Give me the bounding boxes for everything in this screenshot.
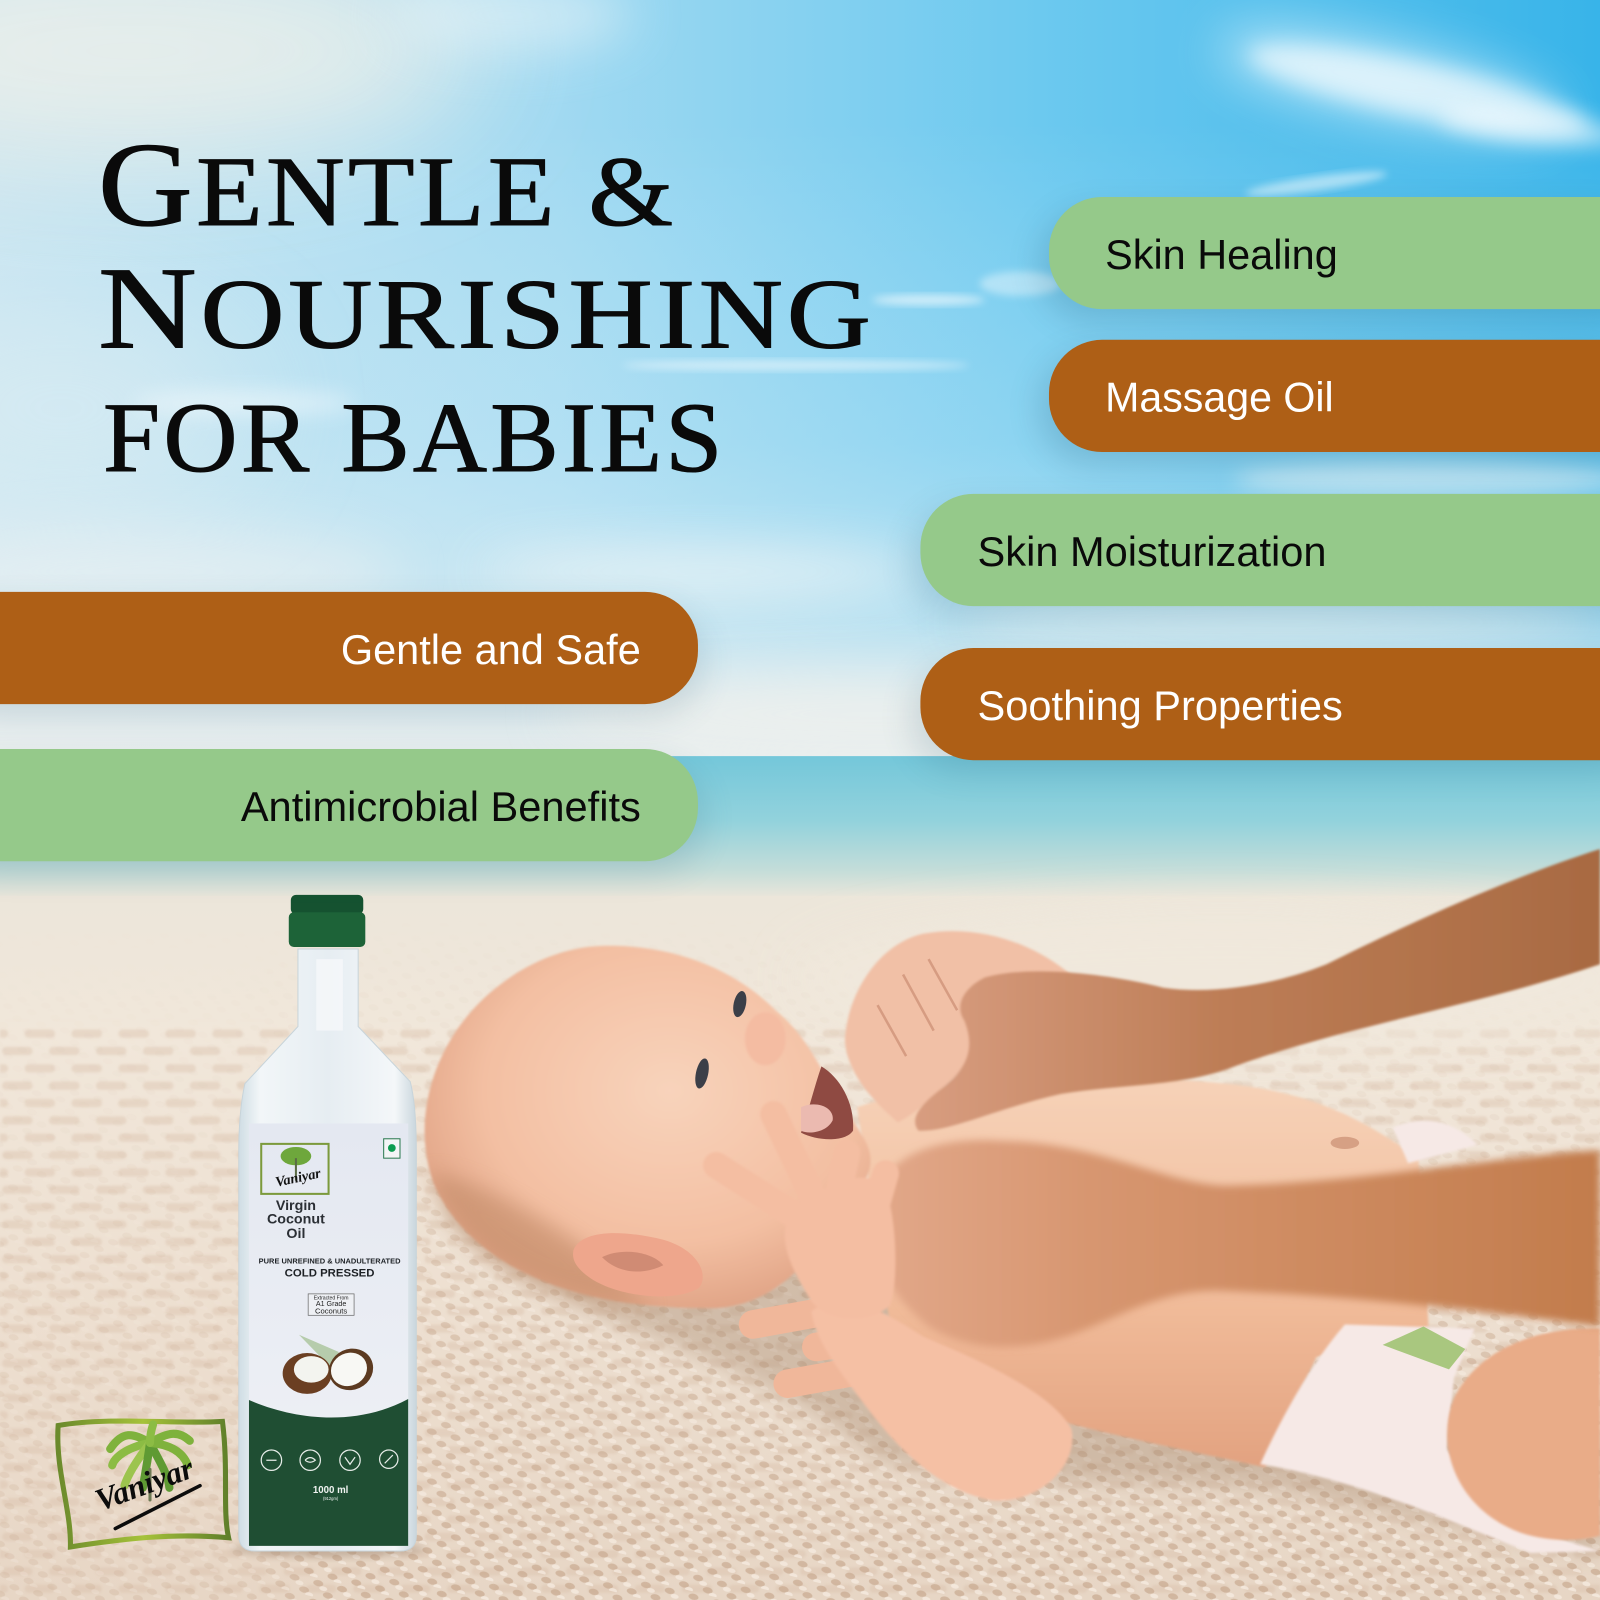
label product name: Oil <box>286 1226 305 1242</box>
logo wordmark: Vaniyar <box>90 1450 199 1518</box>
pill: Massage Oil <box>1039 340 1600 464</box>
diaper <box>1260 1121 1600 1553</box>
ear <box>573 1233 703 1296</box>
title line 1: GENTLE & <box>98 119 677 252</box>
baby upper arm and fist <box>845 931 1082 1122</box>
logo underline <box>115 1486 200 1529</box>
logo palm <box>110 1424 190 1500</box>
background: sand and knit blanket <box>0 896 1600 1600</box>
label volume: (912gm) <box>323 1496 339 1501</box>
brand logo <box>58 1421 229 1547</box>
title line 3: FOR BABIES <box>103 382 726 493</box>
title line 2: NOURISHING <box>98 243 874 373</box>
mouth <box>801 1066 853 1139</box>
pill: Skin Healing: Skin Healing <box>1105 231 1338 278</box>
navel <box>1331 1137 1359 1149</box>
neck highlight <box>316 959 343 1031</box>
pill: Soothing Properties <box>910 648 1600 772</box>
label green base <box>249 1399 408 1546</box>
pill: Antimicrobial Benefits <box>0 749 704 873</box>
veg mark <box>384 1139 400 1158</box>
baby leg <box>1447 1328 1600 1540</box>
head <box>425 946 871 1308</box>
cap <box>289 895 365 947</box>
background: sea band <box>0 756 1600 899</box>
label badge: Coconuts <box>315 1306 347 1315</box>
caregiver upper arm and hand <box>915 849 1600 1131</box>
label logo: Vaniyar <box>274 1165 323 1191</box>
pill: Skin Moisturization: Skin Moisturization <box>978 528 1327 575</box>
label volume <box>313 1485 348 1501</box>
label claims: PURE UNREFINED & UNADULTERATED <box>259 1256 401 1265</box>
label logo <box>261 1144 329 1194</box>
logo frame <box>58 1421 229 1547</box>
caregiver lower arm and hand <box>872 1140 1600 1347</box>
label badge: A1 Grade <box>316 1300 346 1308</box>
second hand fingers <box>753 1311 888 1384</box>
label coconuts illustration <box>283 1335 380 1397</box>
torso <box>857 1078 1429 1467</box>
eyes <box>693 990 749 1090</box>
label <box>249 1123 408 1546</box>
product bottle <box>232 895 426 1557</box>
baby forearm and raised hand <box>716 1114 1072 1501</box>
label badge <box>308 1294 354 1315</box>
pill: Massage Oil: Massage Oil <box>1105 374 1334 421</box>
bottle shadow <box>232 1541 426 1557</box>
pill: Skin Moisturization <box>910 494 1600 618</box>
label icons <box>261 1450 398 1470</box>
pill: Gentle and Safe: Gentle and Safe <box>341 626 641 673</box>
label volume: 1000 ml <box>313 1485 348 1496</box>
baby <box>425 931 1600 1556</box>
background: sky with clouds <box>0 0 1600 776</box>
glass body <box>239 949 416 1551</box>
title <box>98 119 874 493</box>
label product name: Coconut <box>267 1211 325 1227</box>
pill: Soothing Properties: Soothing Properties <box>978 682 1343 729</box>
pill: Antimicrobial Benefits: Antimicrobial Benefits <box>241 783 641 830</box>
label badge: Extracted From <box>314 1295 349 1301</box>
label claims <box>259 1256 401 1280</box>
nose <box>745 1012 786 1065</box>
label claims: COLD PRESSED <box>285 1268 374 1280</box>
label product name <box>267 1198 325 1242</box>
shadow under baby <box>439 1204 1600 1556</box>
diaper tab <box>1383 1327 1465 1369</box>
pill: Skin Healing <box>1039 197 1600 321</box>
hair shade <box>429 1173 653 1308</box>
label product name: Virgin <box>276 1198 316 1214</box>
pill: Gentle and Safe <box>0 592 704 716</box>
